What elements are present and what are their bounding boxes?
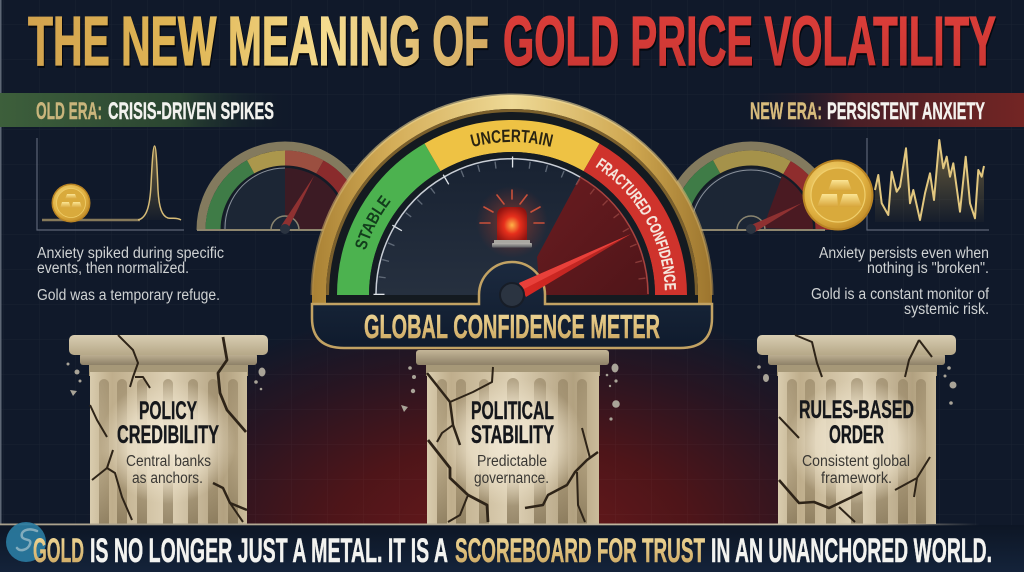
- pillar heading: [799, 396, 914, 449]
- text block: new era description: [811, 245, 990, 318]
- pillar heading: POLICY: [139, 397, 197, 425]
- needle: [519, 234, 631, 297]
- pillar heading: [117, 397, 219, 449]
- pillar cracks: [779, 335, 932, 522]
- era banner: new era: [740, 93, 1024, 127]
- icon: red alarm beacon: [476, 186, 548, 258]
- pillar capital: [757, 335, 956, 376]
- icon: large gold coin: [802, 160, 874, 230]
- logo badge: [6, 522, 46, 562]
- era banner: new era: NEW ERA:: [750, 98, 822, 125]
- falling debris: [757, 365, 956, 405]
- gauge label: uncertain: UNCERTAIN: [470, 130, 554, 147]
- pillar description: governance.: [474, 470, 549, 487]
- takeaway statement: GOLD: [33, 532, 84, 570]
- era banner: old era: [0, 93, 300, 127]
- text block: new era description: Gold is a constant monitor of: [811, 286, 990, 303]
- pillar heading: CREDIBILITY: [117, 421, 219, 449]
- pillar description: framework.: [821, 470, 892, 487]
- pillar capital: [69, 335, 268, 376]
- gauge segment: uncertain: [432, 136, 592, 157]
- takeaway statement: [33, 532, 992, 570]
- era banner: old era: CRISIS-DRIVEN SPIKES: [108, 98, 274, 125]
- pillar shaft: [90, 372, 247, 524]
- small gauge: right: [663, 142, 839, 234]
- pillar heading: STABILITY: [471, 421, 554, 449]
- needle pivot: [500, 283, 524, 307]
- gauge segment: stable: [353, 157, 432, 295]
- base plate and hub arch: [312, 262, 712, 348]
- bottom banner: [0, 522, 1024, 572]
- era banner: old era: OLD ERA:: [36, 98, 102, 125]
- meter title: GLOBAL CONFIDENCE METER: [364, 308, 660, 345]
- pillar: political stability: [401, 350, 620, 524]
- pillar description: [474, 453, 549, 487]
- gauge label: stable: STABLE: [355, 195, 391, 250]
- text block: old era description: events, then normalized.: [37, 260, 189, 277]
- text block: old era description: Gold was a temporary refuge.: [37, 287, 220, 304]
- text block: old era description: [37, 245, 224, 304]
- pillar heading: [471, 397, 554, 449]
- pillar heading: RULES-BASED: [799, 396, 914, 424]
- gauge dial: [369, 152, 655, 295]
- text block: new era description: systemic risk.: [904, 301, 989, 318]
- gauge segment: fractured confidence: [592, 157, 671, 295]
- pillar description: [802, 453, 910, 487]
- pillar shaft: [778, 372, 936, 524]
- falling debris: [401, 364, 620, 421]
- icon: small gold coin: [52, 184, 90, 222]
- global confidence meter: [310, 94, 714, 350]
- takeaway statement: IS NO LONGER JUST A METAL. IT IS A: [90, 532, 448, 570]
- pillar: policy credibility: [66, 335, 268, 524]
- pillar description: as anchors.: [132, 470, 203, 487]
- gauge housing: [312, 95, 712, 306]
- pillar cracks: [427, 367, 598, 522]
- text block: new era description: Anxiety persists even when: [819, 245, 989, 262]
- chart: crisis-driven spike: [37, 138, 184, 230]
- pillar cracks: [90, 335, 247, 522]
- pillar description: Consistent global: [802, 453, 910, 470]
- pillar heading: POLITICAL: [471, 397, 554, 425]
- title: THE NEW MEANING OF: [28, 2, 489, 80]
- chart: persistent anxiety: [867, 138, 989, 230]
- small gauge: left: [197, 142, 373, 234]
- pillar heading: ORDER: [829, 421, 884, 449]
- pillar capital: [416, 350, 609, 376]
- text block: new era description: nothing is "broken".: [867, 260, 989, 277]
- text block: old era description: Anxiety spiked during specific: [37, 245, 224, 262]
- pillar description: [126, 453, 211, 487]
- falling debris: [66, 362, 266, 396]
- pillar shaft: [427, 372, 599, 524]
- takeaway statement: SCOREBOARD FOR TRUST: [455, 532, 705, 570]
- pillar description: Central banks: [126, 453, 211, 470]
- pillar description: Predictable: [477, 453, 547, 470]
- pillar: rules-based order: [757, 335, 956, 524]
- gauge label: fractured confidence: FRACTURED CONFIDENCE: [596, 158, 676, 290]
